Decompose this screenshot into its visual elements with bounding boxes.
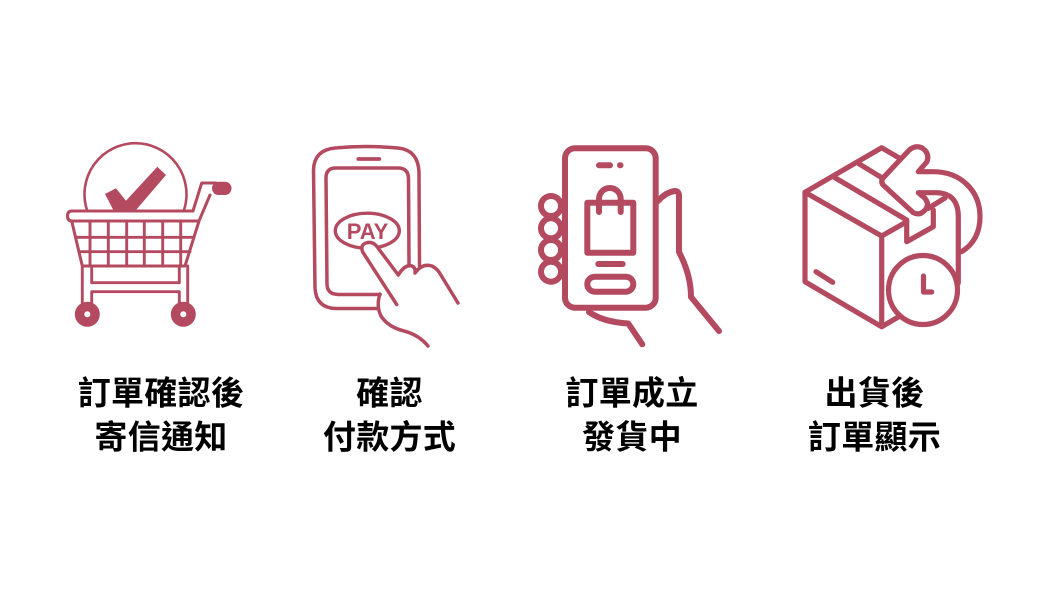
icon: phone with PAY button and finger: PAY bbox=[347, 219, 389, 244]
label: order shown after shipment bbox=[808, 366, 941, 458]
label: order confirmation notice: 訂單確認後 bbox=[78, 366, 244, 414]
icon: phone with PAY button and finger bbox=[314, 146, 458, 346]
label: order placed shipping: 訂單成立 bbox=[565, 366, 699, 414]
label: confirm payment method: 付款方式 bbox=[323, 410, 456, 458]
label: order placed shipping bbox=[565, 366, 699, 458]
label: order placed shipping: 發貨中 bbox=[582, 410, 682, 458]
icon: hand holding phone with shopping bag bbox=[541, 148, 719, 344]
icon: parcel box with return arrow and clock bbox=[805, 147, 980, 327]
label: confirm payment method: 確認 bbox=[356, 366, 423, 414]
label: order shown after shipment: 出貨後 bbox=[825, 366, 924, 414]
label: order confirmation notice: 寄信通知 bbox=[94, 410, 228, 458]
label: confirm payment method bbox=[323, 366, 456, 458]
label: order confirmation notice bbox=[78, 366, 244, 458]
icon: shopping cart with check mark bbox=[68, 143, 232, 327]
label: order shown after shipment: 訂單顯示 bbox=[808, 410, 941, 458]
